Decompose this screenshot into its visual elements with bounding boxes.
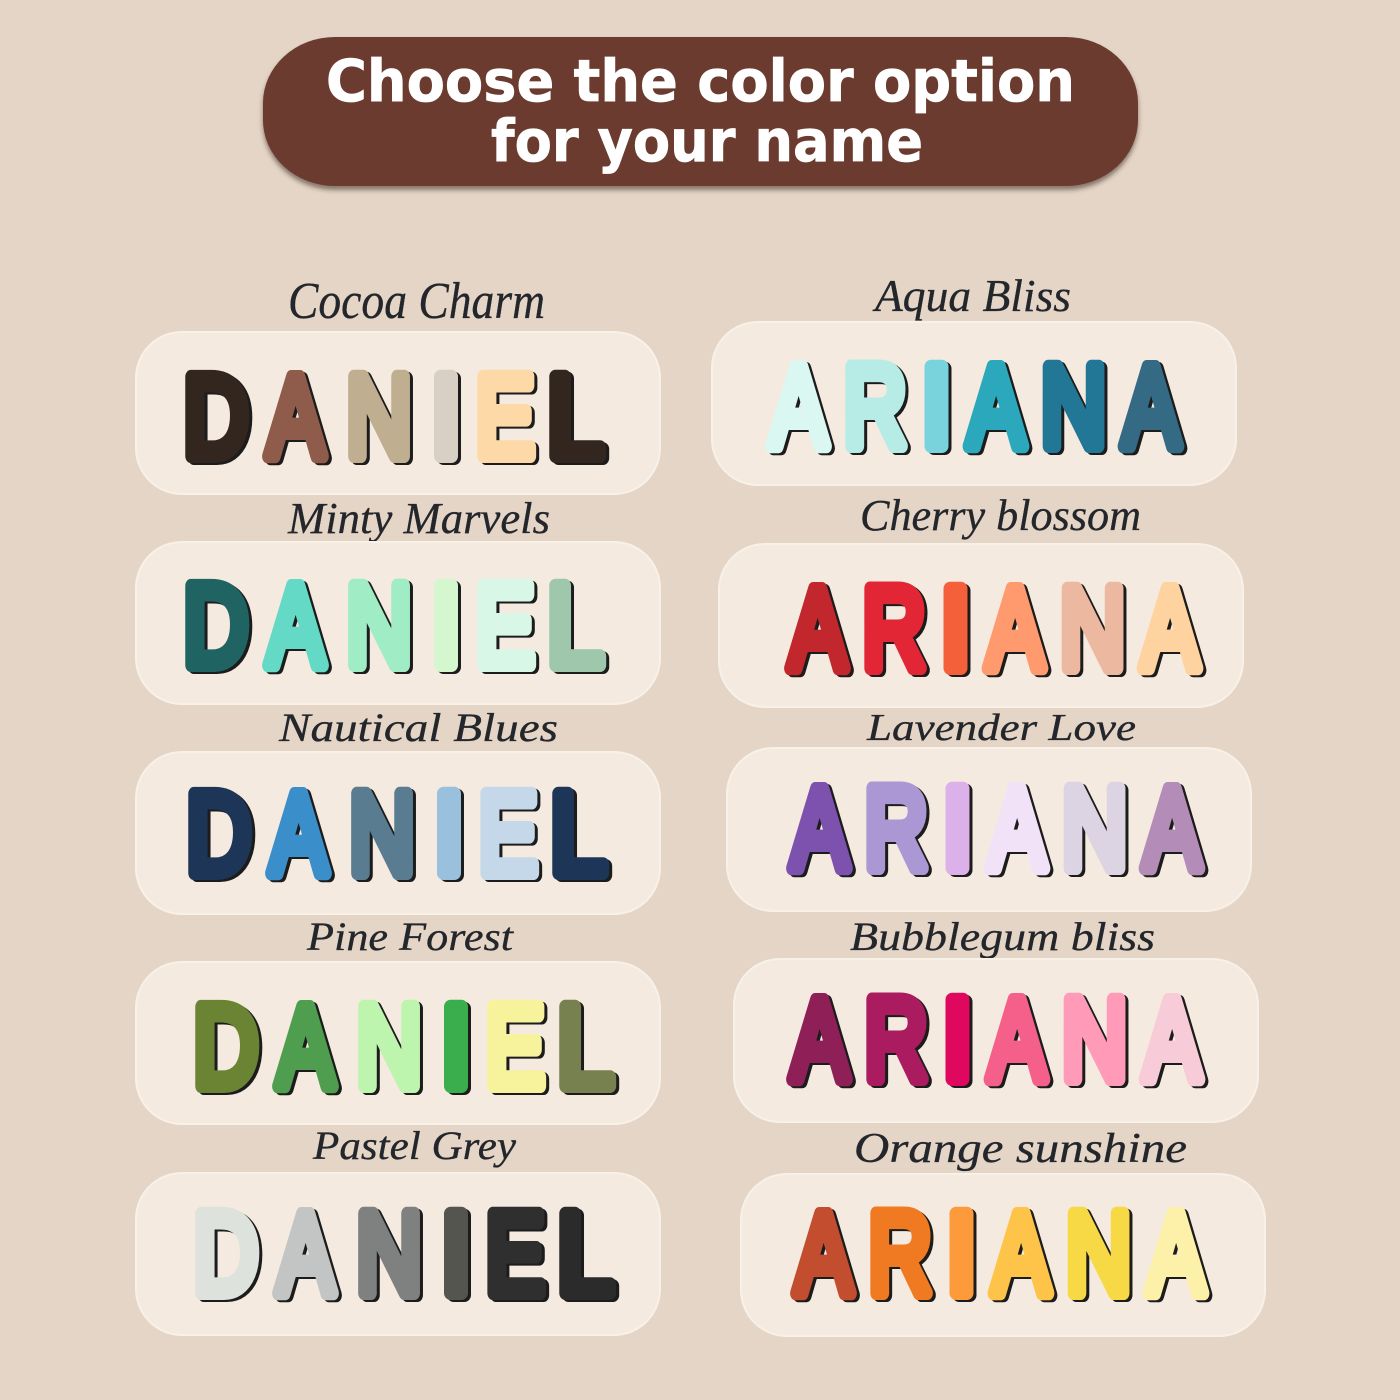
panel: Nautical Blues: N [349, 769, 415, 897]
panel: Minty Marvels [136, 494, 660, 704]
panel: Orange sunshine: A [1148, 1190, 1205, 1318]
panel: Pine Forest: E [485, 982, 545, 1111]
panel: Nautical Blues: E [478, 769, 538, 898]
panel: Pine Forest [136, 914, 660, 1124]
panel: Cherry blossom: A [789, 565, 846, 693]
panel: Minty Marvels: I [430, 561, 462, 690]
panel: Bubblegum bliss: N [1062, 975, 1127, 1103]
panel: Minty Marvels: A [267, 562, 324, 690]
panel: Cocoa Charm: I [430, 352, 462, 481]
panel: Orange sunshine: I [946, 1189, 977, 1318]
panel: Nautical Blues: A [270, 770, 327, 898]
panel: Bubblegum bliss: I [942, 975, 973, 1104]
panel: Lavender Love: R [864, 764, 928, 893]
panel: Bubblegum bliss: A [791, 976, 848, 1104]
panel: Orange sunshine: Orange sunshine [854, 1126, 1187, 1172]
panel: Minty Marvels: D [183, 561, 248, 690]
panel: Aqua Bliss: A [770, 343, 827, 471]
title banner: for your name [491, 107, 923, 175]
panel: Bubblegum bliss: Bubblegum bliss [850, 914, 1155, 959]
panel: Nautical Blues: I [433, 769, 465, 898]
panel: Pastel Grey: E [485, 1189, 545, 1318]
panel: Minty Marvels: N [346, 561, 412, 689]
panel: Cherry blossom: A [1142, 565, 1199, 693]
panel: Pastel Grey: I [440, 1189, 472, 1318]
panel: Nautical Blues: Nautical Blues [278, 705, 558, 750]
panel: Cherry blossom: N [1060, 564, 1125, 692]
panel: Lavender Love: N [1062, 764, 1127, 892]
panel: Cherry blossom: R [862, 564, 926, 693]
panel: Nautical Blues [136, 705, 660, 914]
panel: Cocoa Charm: A [267, 353, 324, 481]
panel: Orange sunshine [741, 1126, 1265, 1336]
panel: Bubblegum bliss: A [1144, 976, 1201, 1104]
panel: Cherry blossom: I [940, 564, 971, 693]
panel: Pastel Grey: Pastel Grey [312, 1123, 516, 1168]
panel: Cocoa Charm: Cocoa Charm [288, 273, 545, 330]
panel: Aqua Bliss: I [921, 342, 952, 471]
panel: Lavender Love: A [1144, 765, 1201, 893]
panel: Cocoa Charm: D [183, 352, 248, 481]
panel: Pine Forest: N [356, 982, 422, 1110]
panel: Cherry blossom: A [987, 565, 1044, 693]
panel: Aqua Bliss: A [1123, 343, 1180, 471]
panel: Aqua Bliss: N [1041, 342, 1106, 470]
panel: Aqua Bliss: R [843, 342, 907, 471]
panel: Pastel Grey: N [356, 1189, 422, 1317]
panel: Lavender Love: A [989, 765, 1046, 893]
panel: Pastel Grey [136, 1123, 660, 1335]
panel: Pine Forest: I [440, 982, 472, 1111]
panel: Cocoa Charm: E [475, 352, 535, 481]
panel: Orange sunshine: A [993, 1190, 1050, 1318]
panel: Minty Marvels: E [475, 561, 535, 690]
panel: Orange sunshine: N [1066, 1189, 1131, 1317]
panel: Minty Marvels: L [547, 561, 603, 689]
panel: Aqua Bliss: Aqua Bliss [872, 270, 1071, 321]
panel: Lavender Love: I [942, 764, 973, 893]
panel: Lavender Love: Lavender Love [866, 707, 1136, 749]
panel: Minty Marvels: Minty Marvels [287, 494, 550, 543]
panel: Cherry blossom [719, 491, 1243, 707]
title banner: Choose the color option [326, 47, 1075, 115]
panel: Aqua Bliss [712, 270, 1236, 485]
panel: Orange sunshine: R [868, 1189, 932, 1318]
panel: Cocoa Charm: N [346, 352, 412, 480]
title banner [263, 37, 1138, 186]
panel: Cocoa Charm: L [547, 352, 603, 480]
panel: Bubblegum bliss [734, 914, 1258, 1122]
panel: Pine Forest: D [193, 982, 258, 1111]
panel: Lavender Love [727, 707, 1251, 911]
panel: Bubblegum bliss: R [864, 975, 928, 1104]
panel: Nautical Blues: L [550, 769, 606, 897]
panel: Pastel Grey: D [193, 1189, 258, 1318]
panel: Orange sunshine: A [795, 1190, 852, 1318]
panel: Cherry blossom: Cherry blossom [860, 491, 1141, 540]
panel: Bubblegum bliss: A [989, 976, 1046, 1104]
panel: Lavender Love: A [791, 765, 848, 893]
panel: Aqua Bliss: A [968, 343, 1025, 471]
panel: Pine Forest: Pine Forest [306, 914, 514, 959]
panel: Nautical Blues: D [186, 769, 251, 898]
panel: Pastel Grey: A [277, 1190, 334, 1318]
panel: Pastel Grey: L [557, 1189, 613, 1317]
panel: Pine Forest: A [277, 983, 334, 1111]
panel: Pine Forest: L [557, 982, 613, 1110]
panel: Cocoa Charm [136, 273, 660, 494]
